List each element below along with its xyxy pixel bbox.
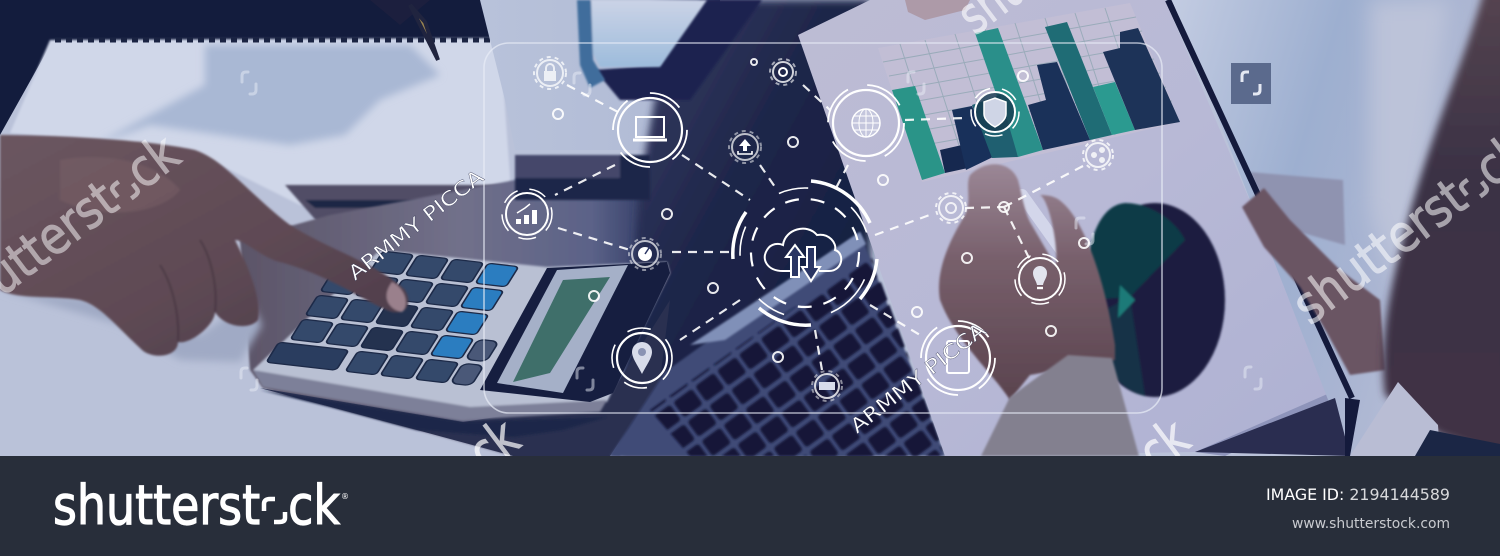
- calculator body: [253, 250, 670, 420]
- central cloud hub: [713, 161, 897, 345]
- author watermark right: ARMMY PICCA: [845, 317, 990, 438]
- clipboard paper: [798, 0, 1332, 456]
- icon: globe: [828, 85, 904, 161]
- registered mark: ®: [341, 492, 349, 501]
- paper lower edge: [1196, 394, 1328, 456]
- icon: tablet: [921, 321, 995, 395]
- dark upper-left background: [0, 0, 500, 135]
- background base: [0, 0, 1345, 456]
- icon: padlock: [534, 57, 566, 89]
- dark desk under calculator: [260, 300, 670, 456]
- left hand pressing calculator: [0, 135, 408, 356]
- icon: pie: [629, 238, 661, 270]
- white sleeve lower right: [1350, 382, 1440, 456]
- website url: www.shutterstock.com: [1292, 516, 1450, 532]
- paper under left hand: [22, 297, 266, 364]
- rounded HUD frame: [484, 43, 1162, 413]
- hub rings: [733, 181, 877, 325]
- notebook spiral binding: [55, 38, 500, 42]
- watermark: stock text bottom centre: ck: [458, 408, 531, 483]
- chart bars: [892, 86, 945, 180]
- icon: laptop: [613, 93, 687, 167]
- centre dark area: [620, 0, 870, 456]
- small node circles: [553, 59, 1089, 362]
- curtain highlight: [1370, 0, 1450, 290]
- footer bar: [0, 456, 1500, 556]
- icon: process gear: [936, 193, 966, 223]
- cloud icon with arrows: [765, 229, 841, 281]
- icon: shield: [971, 88, 1019, 136]
- watermark: bracket marks: [241, 72, 1261, 390]
- pen held at top: [370, 0, 430, 25]
- wooden desk area: [240, 180, 680, 456]
- calculator display housing: [480, 262, 670, 402]
- image id: IMAGE ID: 2194144589: [1266, 485, 1450, 504]
- navy lower right floor: [1195, 398, 1350, 456]
- watermark: bracket tile: [1231, 63, 1271, 104]
- right hand holding clipboard: [1242, 188, 1385, 375]
- network connector lines: [555, 85, 1085, 370]
- notebook shadow: [95, 45, 440, 145]
- watermark: stock text bottom right: ck: [1128, 408, 1201, 483]
- dark desk band: [515, 155, 650, 200]
- notebook page: [10, 38, 512, 205]
- clipboard dark edge redraw: [1168, 0, 1352, 398]
- jacket sleeve: [981, 355, 1139, 456]
- icon: upload: [729, 131, 761, 163]
- icon: battery: [812, 371, 842, 401]
- laptop body: [610, 232, 945, 456]
- dark diagonal behind monitor: [595, 0, 762, 100]
- calculator keys: [266, 251, 518, 386]
- bar chart grid: [878, 3, 1180, 182]
- clipboard dark edge: [1165, 0, 1213, 104]
- wood surface: [1250, 172, 1345, 245]
- hair: [1383, 0, 1500, 460]
- laptop keyboard: [650, 258, 945, 456]
- laptop highlight streak: [690, 232, 866, 345]
- calculator shadow: [260, 390, 607, 437]
- calculator LCD: [513, 277, 610, 382]
- pen in writing hand: [1022, 195, 1092, 293]
- clipboard clip: [905, 0, 970, 20]
- folders on desk: [284, 184, 497, 220]
- icon: growth chart: [502, 189, 552, 239]
- calculator: [253, 246, 670, 437]
- footer logo: shutterstock: [53, 474, 341, 537]
- icon: share: [1083, 140, 1113, 170]
- author watermark left: ARMMY PICCA: [343, 164, 488, 285]
- icon: lightbulb: [1015, 254, 1065, 304]
- monitor screen: [577, 0, 707, 88]
- lilac background behind monitor: [480, 0, 720, 116]
- icon: location pin: [612, 328, 672, 388]
- right background wall: [1172, 0, 1500, 456]
- writing hand: [939, 164, 1115, 400]
- icon: settings gear: [770, 59, 796, 85]
- pie chart: [1085, 203, 1225, 397]
